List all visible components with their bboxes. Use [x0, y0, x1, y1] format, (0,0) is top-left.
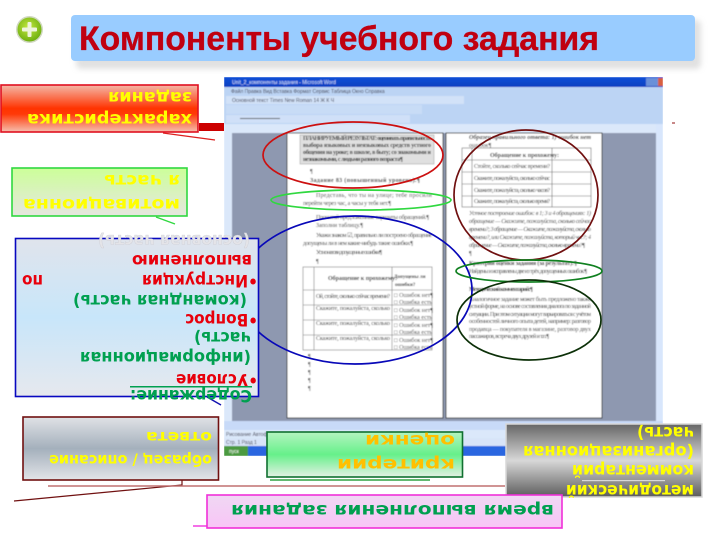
page 1 of document: Скажите, пожалуйста, сколько: [316, 305, 390, 312]
page 2 of document: обращение — Скажите, пожалуйста, сколько сейчас: [469, 218, 591, 225]
screenshot of word processor with the task: Unit_2_компоненты задания - Microsoft Word: [232, 80, 336, 86]
page 2 of document: Методический комментарий:¶: [469, 286, 533, 293]
blue oval: task content: [238, 216, 472, 364]
page 2 of document: Скажите, пожалуйста, сколько часов?: [474, 187, 550, 194]
dark red oval: answer sample: [454, 130, 598, 260]
label: time to complete the task: время выполнения задания: [231, 501, 554, 520]
label: task content: [16, 231, 258, 405]
label: answer sample: [23, 417, 218, 480]
page 1 of document: Заполни таблицу.¶: [316, 222, 363, 229]
red oval: task characteristic: [263, 122, 443, 188]
page 1 of document: ¶: [308, 378, 311, 384]
page 2 of document: обращение — Скажите, пожалуйста, сколько времени?¶: [469, 242, 585, 249]
dark oval: methodical commentary: [457, 280, 601, 360]
screenshot of word processor with the task: Основной текст Times New Roman 14 Ж К Ч: [232, 97, 334, 104]
label: methodical commentary: [506, 423, 702, 500]
page 1 of document: ¶: [310, 169, 313, 175]
label: assessment criteria: критерии: [337, 455, 455, 474]
overflowing line: main part: (основная часть): [98, 231, 250, 250]
page 1 of document: [287, 133, 443, 418]
page 2 of document: Скажите, пожалуйста, сколько сейчас: [474, 175, 550, 182]
page 2 of document: Обращение к прохожему:: [490, 152, 559, 159]
label: task content: •Инструкция: [142, 271, 258, 290]
label: methodical commentary: часть): [637, 423, 694, 442]
label: answer sample: образец / описание: [49, 451, 212, 469]
green oval: motivation part: [271, 190, 451, 210]
title banner: [71, 15, 701, 69]
screenshot of word processor with the task: Файл Правка Вид Вставка Формат Сервис Таблица Окно Справка: [231, 88, 385, 95]
page 2 of document: Найдены и исправлены две из трёх допущенных ошибок.¶: [469, 268, 587, 275]
page 2 of document: времени?; 3 обращение — Скажите, пожалуйста, сколько: [469, 226, 591, 233]
page 2 of document: Стойте, сколько сейчас времени?: [474, 163, 550, 170]
page 1 of document: ¶: [308, 362, 311, 368]
screenshot of word processor with the task: [224, 77, 663, 456]
screenshot of word processor with the task: Стр. 1 Разд 1: [226, 440, 257, 446]
page 1 of document: □ Ошибок нет¶: [394, 337, 433, 344]
page 2 of document: пассажиров, встреча двух друзей и т.п.¶: [469, 333, 549, 340]
page 1 of document: Скажите, пожалуйста, сколько: [316, 320, 390, 327]
page 1 of document: Прочитай предложенные варианты обращений.¶: [316, 214, 429, 221]
page 1 of document: Укажи знаком ☑, правильно ли построено обращение: [316, 232, 432, 239]
label: motivation part: я часть: [104, 171, 180, 190]
label: task content: выполнению: [132, 251, 252, 270]
label: motivation part: [12, 168, 187, 216]
label: task content: (командная часть): [73, 291, 247, 310]
page 1 of document: Ой, стойте, сколько сейчас времени?: [316, 293, 390, 300]
title: Компоненты учебного задания: [79, 20, 599, 58]
page 2 of document: ошибок¶: [469, 142, 491, 149]
page 1 of document: незнакомыми, с людьми разного возраста¶: [303, 157, 403, 163]
green oval: assessment criteria: [456, 260, 602, 282]
page 1 of document: □ Ошибок нет¶: [394, 292, 433, 299]
label: task content: часть): [194, 328, 251, 347]
page 1 of document: Скажите, пожалуйста, сколько: [316, 335, 390, 342]
page 2 of document: ¶: [469, 251, 472, 257]
page 1 of document: допущены ли в нем какие-нибудь такие ошибки.¶: [303, 240, 413, 247]
marker ovals on the document: [238, 122, 602, 364]
page 2 of document: особенностей личного опыта детей, например: разговор: [469, 318, 591, 325]
label: assessment criteria: [267, 431, 462, 477]
page 1 of document: ¶: [308, 386, 311, 392]
page 1 of document: ¶: [316, 259, 319, 265]
page 1 of document: перейти через час, а часы у тебя нет.¶: [303, 200, 391, 207]
page 2 of document: продавца — покупателя в магазине, разговор двух: [469, 327, 591, 333]
page 2 of document: Аналогичное задание может быть предложено также: [469, 296, 591, 303]
label: task characteristic: характеристика: [27, 110, 192, 129]
page 1 of document: общения на уроке; в школе, в быту; со знакомыми и: [303, 149, 432, 156]
label: task content: по: [22, 271, 43, 290]
page 1 of document: ¶: [308, 354, 311, 360]
page 2 of document: устной форме, на основе составления диалога по заданной: [469, 303, 592, 310]
page 2 of document: Образец правильного ответа: 1) ошибок нет: [469, 134, 591, 141]
page 1 of document: ¶: [308, 370, 311, 376]
page 2 of document: Скажите, пожалуйста, сколько время?: [474, 198, 550, 205]
screenshot of word processor with the task: Рисование Автофигуры: [226, 432, 281, 438]
label: task characteristic: задания: [108, 88, 192, 107]
label: task content: •Вопрос: [185, 310, 258, 329]
page 1 of document: выбора языковых и неязыковых средств устного: [303, 142, 431, 149]
page 2 of document: времени?, или Скажите, пожалуйста, который час?; 4: [469, 234, 591, 241]
label: methodical commentary: (организационная: [523, 442, 694, 461]
page 1 of document: □ Ошибка есть: [394, 299, 432, 306]
icon: green plus button: [16, 16, 43, 43]
label: task content: •Условие: [176, 370, 258, 389]
page 2 of document: Устное построение ошибок: в 1; 3 и 4 обращениях: 1): [469, 210, 591, 217]
label: methodical commentary: методический: [566, 481, 694, 500]
page 2 of document: [446, 133, 602, 418]
page 1 of document: ПЛАНИРУЕМЫЙ РЕЗУЛЬТАТ: оценивать правильность: [303, 134, 432, 142]
label: task content: (информационная: [80, 348, 251, 367]
page 1 of document: □ Ошибок нет¶: [394, 307, 433, 314]
decorative connector lines: [14, 123, 675, 526]
page 1 of document: Устно назови допущенные ошибки.¶: [316, 249, 382, 256]
label: assessment criteria: оценки: [365, 431, 455, 450]
page 1 of document: □ Ошибка есть: [394, 329, 432, 336]
page 1 of document: □ Ошибка есть: [394, 314, 432, 321]
label: answer sample: ответа: [146, 428, 212, 446]
page 1 of document: Задание 83 (повышенный уровень).¶: [310, 177, 420, 184]
page 1 of document: Представь, что ты на улице; тебе просили: [316, 192, 433, 199]
page 1 of document: □ Ошибка есть: [394, 344, 432, 351]
label: time to complete the task: [207, 495, 562, 528]
page 2 of document: ситуации. При этом ситуации могут варьироваться с учётом: [469, 312, 591, 318]
screenshot of word processor with the task: пуск: [229, 449, 240, 455]
page 1 of document: ошибки?: [395, 283, 416, 288]
label: methodical commentary: комментарий: [572, 461, 694, 480]
page 1 of document: Обращение к прохожему:: [328, 275, 397, 282]
label: task content: Содержание:: [130, 386, 252, 405]
label: task characteristic: [1, 85, 198, 132]
page 1 of document: □ Ошибок нет¶: [394, 322, 433, 329]
page 2 of document: Критерии оценки задания (за результат):¶: [469, 260, 577, 267]
label: motivation part: мотивационна: [23, 195, 180, 214]
page 1 of document: Допущены ли: [394, 275, 426, 280]
